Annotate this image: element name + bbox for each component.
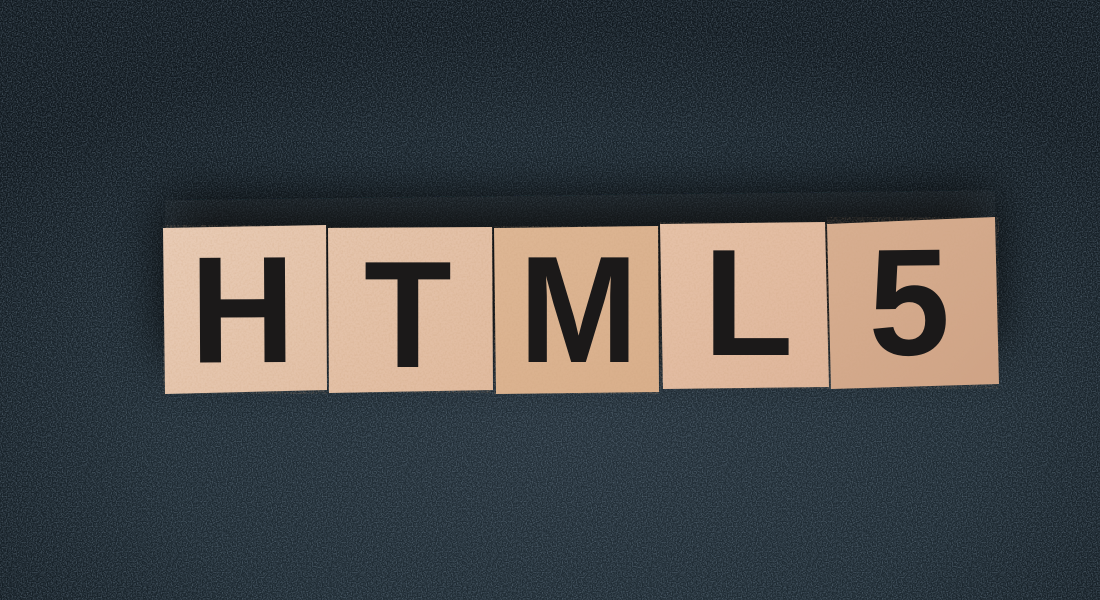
tile: 5: 5 <box>868 217 950 388</box>
tile: H: H <box>190 225 295 395</box>
tile row <box>163 217 999 400</box>
tile: T <box>328 227 493 400</box>
tile: H <box>163 225 327 395</box>
tile shadow <box>165 190 995 360</box>
tile: L <box>660 218 829 389</box>
tile: L: L <box>704 218 793 388</box>
tile: M: M <box>519 225 638 395</box>
tile: T: T <box>364 230 452 400</box>
tile: 5 <box>827 217 999 389</box>
